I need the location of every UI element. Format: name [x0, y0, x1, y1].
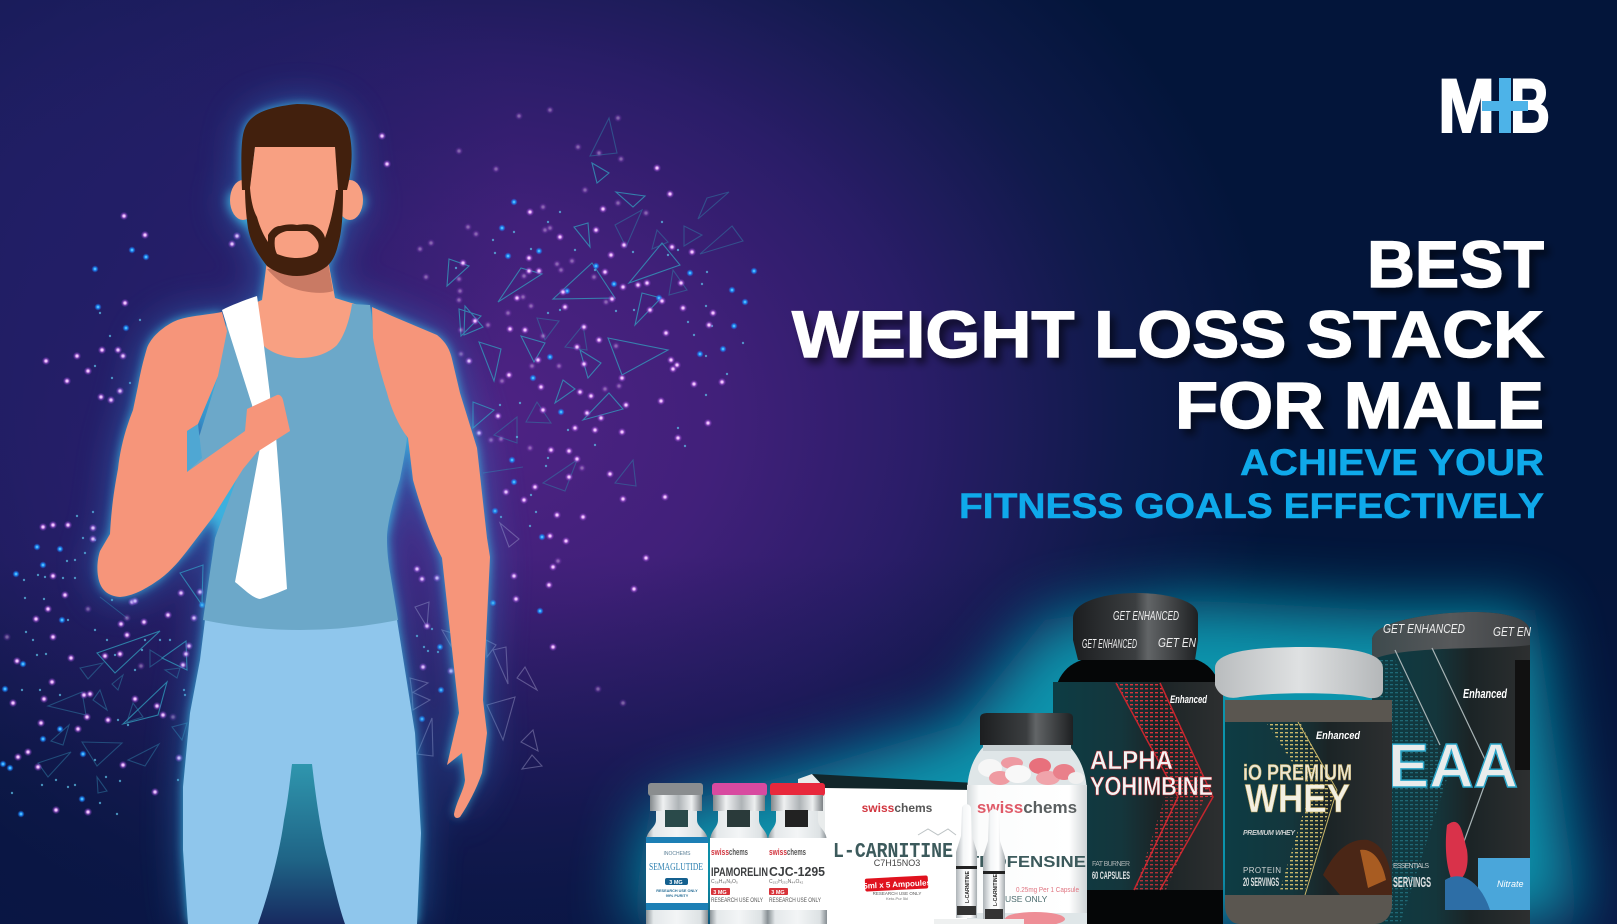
product: CJC-1295 vial: RESEARCH USE ONLY [769, 897, 821, 904]
particle field: blue stars [0, 198, 758, 818]
product: EAA tub: Enhanced [1463, 686, 1508, 701]
ampoules [934, 804, 1024, 924]
title: FOR MALE [1175, 368, 1544, 442]
product: Semaglutide vial [646, 783, 708, 924]
product: Semaglutide vial: SEMAGLUTIDE [649, 861, 703, 873]
product: L-Carnitine box: RESEARCH USE ONLY [873, 891, 921, 896]
hair [241, 104, 352, 190]
product: L-Carnitine box [798, 774, 975, 924]
product: iO Premium Whey tub: Enhanced [1316, 730, 1360, 742]
product: Ipamorelin vial: chems [729, 847, 748, 857]
product: Alpha Yohimbine bottle: YOHIMBINE [1090, 771, 1213, 801]
trousers [183, 620, 421, 924]
product: L-Carnitine box: C7H15NO3 [874, 858, 920, 868]
logo: B [1510, 64, 1550, 149]
whey chocolate splash [1323, 840, 1392, 895]
product: L-Carnitine box: 5ml x 5 Ampoules [863, 878, 932, 891]
product: EAA tub: GET EN [1493, 624, 1531, 639]
product: Alpha Yohimbine bottle: GET EN [1158, 635, 1196, 650]
product: Ipamorelin vial: swiss [711, 847, 729, 857]
ampoule one: L-CARNITINE [965, 870, 971, 903]
product: Trofensine pill bottle: USE ONLY [1005, 894, 1048, 904]
product: L-Carnitine box: swisschems [862, 801, 933, 815]
product: Semaglutide vial: RESEARCH USE ONLY [656, 889, 698, 893]
particle field: triangles [38, 118, 743, 793]
product: Trofensine pill bottle [967, 713, 1087, 924]
product: L-Carnitine box: Keto-Pur 5kl [886, 896, 908, 901]
product: Alpha Yohimbine bottle: ALPHA [1090, 745, 1173, 775]
product: CJC-1295 vial: CJC-1295 [769, 864, 825, 879]
beard [245, 188, 343, 276]
whey lid [1215, 647, 1383, 698]
product: iO Premium Whey tub: iO PREMIUM [1243, 760, 1352, 785]
particle field: dim stars [3, 106, 650, 721]
product: iO Premium Whey tub: PROTEIN [1243, 866, 1281, 875]
product: CJC-1295 vial: C₁₅₂H₂₅₂N₄₄O₄₂ [769, 879, 803, 885]
ampoule two: L-CARNITINE [993, 873, 999, 906]
logo: M [1438, 64, 1495, 149]
man figure glow [97, 104, 490, 924]
product: iO Premium Whey tub: PREMIUM WHEY [1243, 830, 1296, 837]
subtitle [959, 442, 1544, 526]
neck and chest [232, 260, 358, 362]
product: Alpha Yohimbine bottle: FAT BURNER [1092, 861, 1130, 868]
product: Alpha Yohimbine bottle: 60 CAPSULES [1092, 870, 1130, 882]
title [792, 227, 1544, 442]
particle field: purple stars [9, 132, 726, 816]
product: Ipamorelin vial: 3 MG [713, 890, 727, 896]
neck shadow [267, 262, 333, 293]
product: Semaglutide vial: INOCHEMS [664, 851, 691, 857]
towel [222, 296, 287, 599]
product: Trofensine pill bottle: TROFENSINE [968, 854, 1086, 871]
product: Ipamorelin vial: IPAMORELIN [711, 865, 768, 879]
product: iO Premium Whey tub: 20 SERVINGS [1243, 875, 1279, 889]
subtitle: ACHIEVE YOUR [1240, 442, 1544, 483]
product: Alpha Yohimbine bottle [1053, 593, 1223, 924]
product: EAA tub: EAA [1388, 732, 1518, 801]
product: CJC-1295 vial: 3 MG [771, 890, 785, 896]
face [250, 147, 338, 262]
product: Alpha Yohimbine bottle: GET ENHANCED [1113, 608, 1179, 623]
logo plus [1482, 78, 1528, 133]
particle field: tiny stars [11, 211, 744, 815]
product: CJC-1295 vial [768, 783, 827, 924]
product: L-Carnitine box: L-CARNITINE [833, 841, 953, 864]
gap between legs [258, 764, 345, 924]
arm holding towel [97, 312, 290, 597]
product: Ipamorelin vial: RESEARCH USE ONLY [711, 897, 763, 904]
title: BEST [1367, 227, 1544, 301]
product: EAA tub: GET ENHANCED [1383, 621, 1465, 636]
tank top [187, 304, 407, 630]
product: iO Premium Whey tub: WHEY [1245, 777, 1350, 821]
tank strap tab [187, 424, 202, 472]
product: Semaglutide vial: 3 MG [669, 880, 683, 886]
EAA splash art: Nitrate [1497, 879, 1524, 889]
title: WEIGHT LOSS STACK [792, 297, 1544, 371]
product: Trofensine pill bottle: swisschems [977, 798, 1077, 817]
product: EAA tub: ESSENTIALS [1393, 863, 1429, 870]
ears [230, 180, 363, 220]
product: EAA tub [1372, 612, 1531, 924]
product: Ipamorelin vial [710, 783, 768, 924]
pills [978, 757, 1084, 785]
product: Alpha Yohimbine bottle: GET ENHANCED [1082, 636, 1137, 651]
product: iO Premium Whey tub [1215, 647, 1392, 924]
teal glow behind products [630, 600, 1580, 924]
product: Alpha Yohimbine bottle: Enhanced [1170, 694, 1207, 706]
subtitle: FITNESS GOALS EFFECTIVELY [959, 487, 1544, 526]
product: Semaglutide vial: 99% PURITY [666, 894, 689, 898]
product: Ipamorelin vial: C₃₈H₄₉N₉O₅ [711, 879, 738, 885]
hanging arm [372, 307, 490, 818]
product: Trofensine pill bottle: 0.25mg Per 1 Capsule [1016, 885, 1079, 894]
logo [1438, 64, 1550, 149]
EAA splash art [1445, 822, 1530, 910]
product: CJC-1295 vial: swiss [769, 847, 787, 857]
Alpha bottle cap [1073, 593, 1198, 660]
product: EAA tub: SERVINGS [1393, 874, 1431, 891]
man figure [97, 104, 490, 924]
product: CJC-1295 vial: chems [787, 847, 806, 857]
